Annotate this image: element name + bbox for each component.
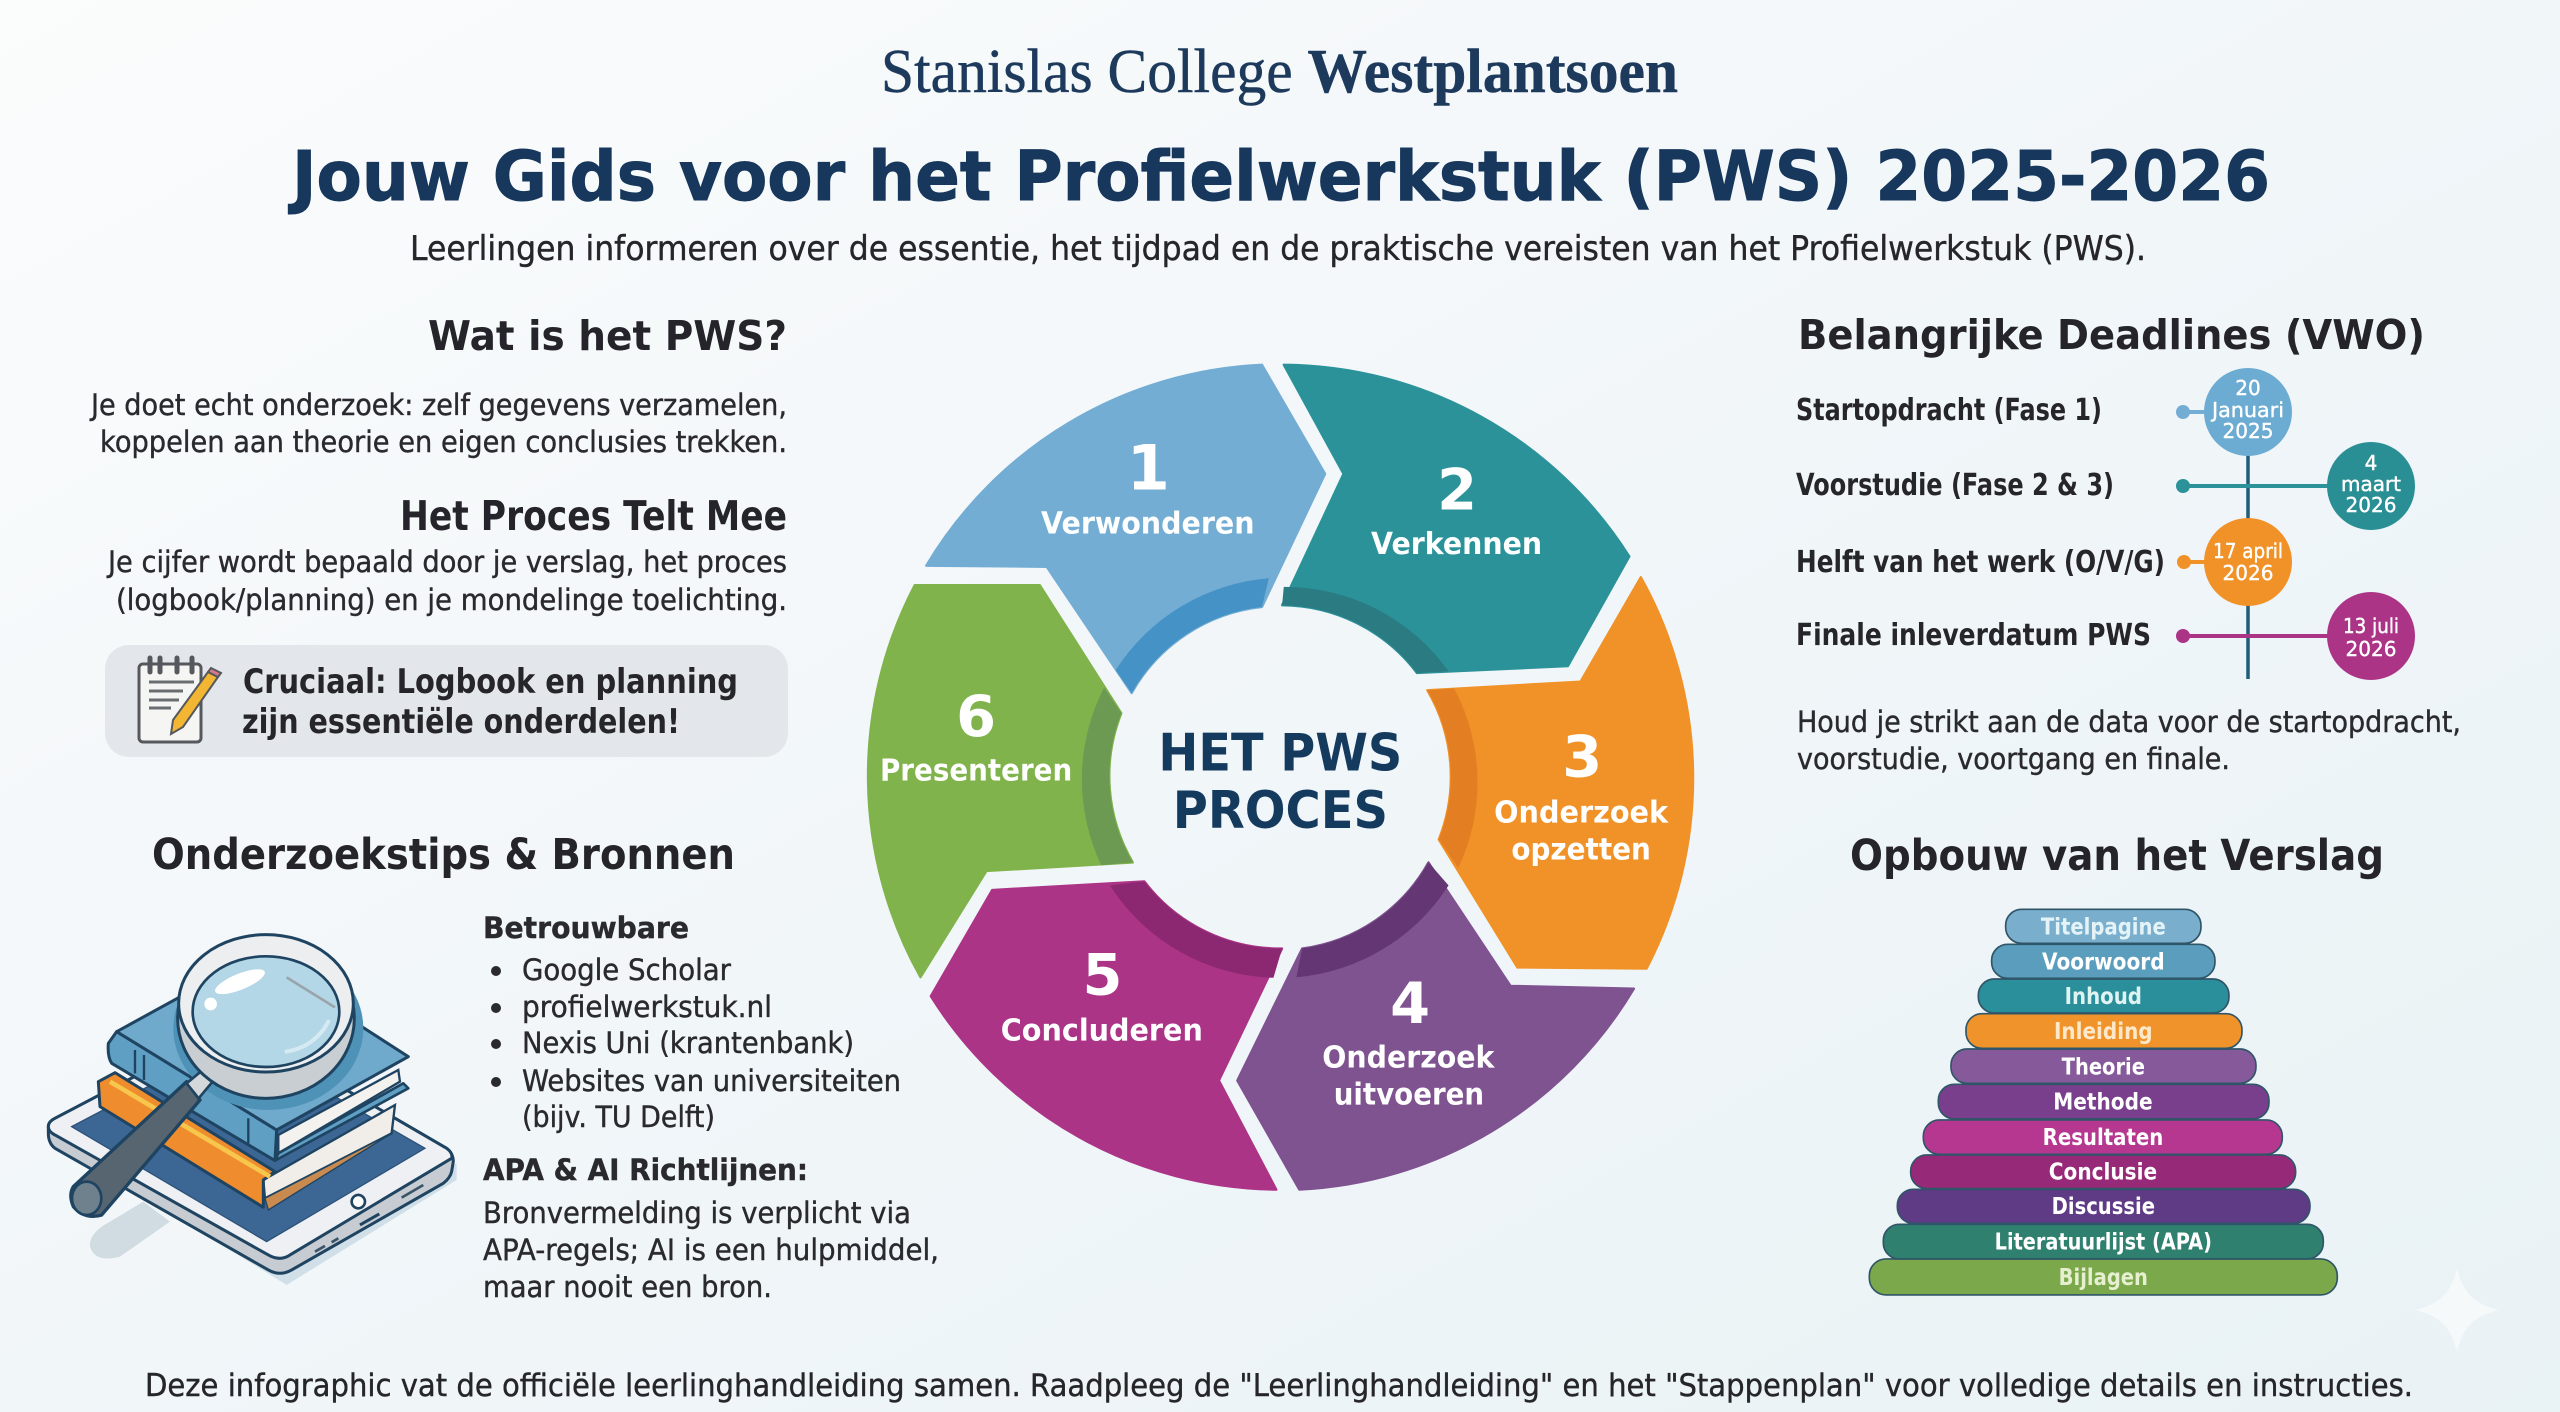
segment 5: concluderen	[931, 881, 1282, 1190]
heading: deadlines: Belangrijke Deadlines (VWO)	[1798, 311, 2425, 359]
layer: titelpagine	[2006, 909, 2201, 943]
layer: inhoud: Inhoud	[2065, 984, 2142, 1010]
layer: methode	[1938, 1084, 2269, 1119]
text block: APA en AI richtlijnen: APA & AI Richtlijnen:	[483, 1153, 808, 1187]
heading: wat is het PWS: Wat is het PWS?	[428, 312, 787, 360]
text block: deadlines note	[1797, 705, 2461, 776]
deadline row: finale inleverdatum: 13 juli	[2343, 614, 2399, 638]
text block: APA en AI richtlijnen: Bronvermelding is verplicht via	[483, 1196, 911, 1230]
icon: notepad and pencil	[139, 658, 221, 742]
segment 6: presenteren: Presenteren	[880, 753, 1072, 788]
segment 4: onderzoek uitvoeren: uitvoeren	[1334, 1078, 1484, 1113]
list: betrouwbare bronnen: (bijv. TU Delft)	[522, 1100, 715, 1134]
list: betrouwbare bronnen: profielwerkstuk.nl	[522, 990, 772, 1024]
centre label: PROCES	[1173, 781, 1388, 841]
text block: APA en AI richtlijnen: APA-regels; AI is een hulpmiddel,	[483, 1233, 939, 1267]
panel: wat is het PWS	[89, 312, 788, 757]
deadline row: helft van het werk: 2026	[2223, 561, 2273, 585]
segment 1: verwonderen	[926, 365, 1325, 693]
segment 5: concluderen: Concluderen	[1001, 1013, 1203, 1048]
text block: wat is het PWS: koppelen aan theorie en eigen conclusies trekken.	[100, 425, 787, 459]
segment 4: onderzoek uitvoeren: 4	[1390, 970, 1430, 1037]
panel: opbouw van het verslag	[1850, 831, 2384, 1295]
layer: conclusie: Conclusie	[2049, 1159, 2157, 1185]
text block: deadlines note: voorstudie, voortgang en finale.	[1797, 742, 2230, 776]
layer: bijlagen	[1869, 1259, 2337, 1295]
segment 2: verkennen: 2	[1437, 456, 1477, 523]
deadline row: helft van het werk: Helft van het werk (O/V/G)	[1796, 545, 2165, 580]
deadline row: voorstudie: Voorstudie (Fase 2 & 3)	[1796, 468, 2114, 503]
segment 6: presenteren	[868, 585, 1133, 977]
text block: het proces telt mee: Je cijfer wordt bepaald door je verslag, het proces	[106, 545, 787, 579]
list: betrouwbare bronnen: Betrouwbare	[483, 911, 689, 945]
layer: bijlagen: Bijlagen	[2059, 1263, 2148, 1291]
segment 5: concluderen: 5	[1082, 941, 1122, 1008]
text block: wat is het PWS: Je doet echt onderzoek: zelf gegevens verzamelen,	[89, 388, 787, 422]
segment 6: presenteren: 6	[956, 683, 996, 750]
deadline row: finale inleverdatum	[1796, 592, 2415, 680]
callout: cruciaal	[105, 645, 788, 757]
deadline row: startopdracht: 20	[2235, 376, 2261, 400]
layer: inleiding	[1966, 1014, 2242, 1048]
centre label: HET PWS	[1158, 724, 1402, 784]
segment 3: onderzoek opzetten: opzetten	[1511, 833, 1651, 868]
deadline row: helft van het werk: 17 april	[2213, 539, 2283, 563]
deadline row: voorstudie: 2026	[2346, 493, 2396, 517]
deadline row: voorstudie	[1796, 442, 2415, 530]
footer note: Deze infographic vat de officiële leerlinghandleiding samen. Raadpleeg de "Leerlinghandleiding" en het "Stappenplan" voor volledige details en instructies.	[145, 1368, 2413, 1404]
segment 4: onderzoek uitvoeren	[1237, 862, 1634, 1190]
layer: resultaten	[1923, 1120, 2282, 1154]
layer: voorwoord: Voorwoord	[2042, 949, 2165, 975]
layer: theorie: Theorie	[2062, 1054, 2145, 1080]
text block: het proces telt mee	[106, 545, 787, 617]
layer: voorwoord	[1992, 944, 2215, 978]
deadline row: helft van het werk	[1796, 518, 2292, 606]
layer: titelpagine: Titelpagine	[2041, 914, 2166, 940]
list: betrouwbare bronnen: Google Scholar	[522, 953, 731, 987]
layer: conclusie	[1911, 1155, 2296, 1189]
segment 2: verkennen: Verkennen	[1371, 527, 1542, 562]
deadline row: startopdracht: Januari	[2210, 398, 2284, 422]
deadline row: voorstudie: 4	[2365, 451, 2377, 475]
school name: Stanislas College Westplantsoen	[881, 38, 1678, 106]
pyramid chart	[1869, 909, 2337, 1295]
deadline row: startopdracht: 2025	[2223, 419, 2273, 443]
layer: methode: Methode	[2053, 1089, 2153, 1115]
illustration: books, tablet and magnifier	[48, 935, 457, 1285]
text block: APA en AI richtlijnen	[483, 1153, 939, 1304]
subtitle: Leerlingen informeren over de essentie, het tijdpad en de praktische vereisten van het Profielwerkstuk (PWS).	[410, 229, 2146, 269]
segment 1: verwonderen: 1	[1127, 431, 1170, 504]
title: Jouw Gids voor het Profielwerkstuk (PWS) 2025-2026	[288, 137, 2270, 217]
layer: discussie: Discussie	[2052, 1194, 2155, 1220]
text block: deadlines note: Houd je strikt aan de data voor de startopdracht,	[1797, 705, 2461, 739]
list: betrouwbare bronnen: Nexis Uni (krantenbank)	[522, 1026, 854, 1060]
segment 3: onderzoek opzetten: Onderzoek	[1494, 795, 1669, 830]
header	[288, 38, 2270, 269]
layer: inhoud	[1978, 979, 2229, 1013]
heading: het proces telt mee: Het Proces Telt Mee	[400, 492, 787, 540]
layer: literatuurlijst	[1883, 1224, 2323, 1259]
heading: opbouw: Opbouw van het Verslag	[1850, 831, 2384, 881]
icon: sparkle watermark	[2415, 1268, 2499, 1352]
text block: wat is het PWS	[89, 388, 787, 459]
deadline row: voorstudie: maart	[2341, 472, 2401, 496]
heading: onderzoekstips: Onderzoekstips & Bronnen	[152, 830, 735, 880]
chart: PWS process cycle	[868, 365, 1693, 1190]
segment 3: onderzoek opzetten	[1427, 577, 1693, 969]
layer: theorie	[1951, 1049, 2256, 1083]
timeline	[1796, 368, 2415, 680]
deadline row: finale inleverdatum: Finale inleverdatum PWS	[1796, 618, 2151, 653]
segment 2: verkennen	[1282, 365, 1629, 673]
layer: inleiding: Inleiding	[2054, 1019, 2153, 1045]
deadline row: startopdracht: Startopdracht (Fase 1)	[1796, 393, 2102, 428]
layer: resultaten: Resultaten	[2043, 1125, 2163, 1151]
deadline row: finale inleverdatum: 2026	[2346, 637, 2396, 661]
segment 4: onderzoek uitvoeren: Onderzoek	[1322, 1040, 1496, 1075]
centre label	[1158, 724, 1402, 841]
callout text: zijn essentiële onderdelen!	[242, 702, 680, 742]
callout text: Cruciaal: Logbook en planning	[243, 662, 738, 702]
segment 3: onderzoek opzetten: 3	[1562, 723, 1602, 790]
text block: APA en AI richtlijnen: maar nooit een bron.	[483, 1270, 772, 1304]
text block: het proces telt mee: (logbook/planning) en je mondelinge toelichting.	[116, 583, 787, 617]
callout text	[242, 662, 738, 742]
panel: onderzoekstips en bronnen	[48, 830, 939, 1304]
list: betrouwbare bronnen: Websites van universiteiten	[522, 1064, 901, 1098]
deadline row: startopdracht	[1796, 368, 2292, 456]
segment 1: verwonderen: Verwonderen	[1041, 507, 1255, 542]
layer: literatuurlijst: Literatuurlijst (APA)	[1995, 1229, 2212, 1255]
list: betrouwbare bronnen	[483, 911, 901, 1134]
panel: belangrijke deadlines	[1796, 311, 2461, 776]
layer: discussie	[1897, 1189, 2310, 1223]
